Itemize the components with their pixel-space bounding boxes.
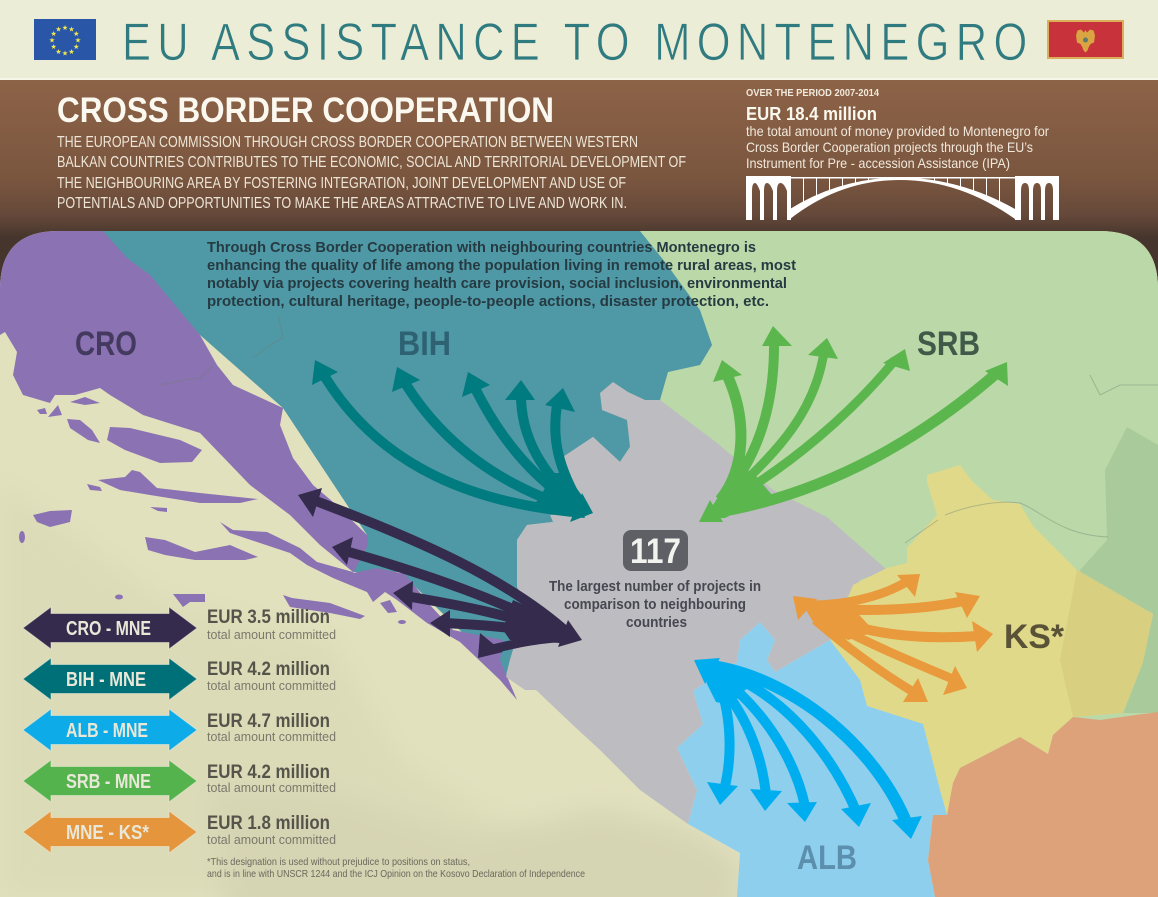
text block: intro paragraph: THE EUROPEAN COMMISSION THROUGH CROSS BORDER COOPERATION BETWEEN WESTERN (57, 134, 638, 151)
icon: EU flag: ★ (51, 43, 57, 51)
legend: BIH amount: EUR 4.2 million (207, 658, 330, 680)
icon: EU flag: ★ (73, 43, 79, 51)
icon: EU flag: ★ (62, 24, 68, 32)
icon: EU flag: ★ (55, 48, 62, 56)
callout: 117 projects (549, 530, 761, 631)
icon: EU flag: ★ (49, 36, 55, 44)
heading: cross border cooperation: CROSS BORDER COOPERATION (57, 91, 554, 130)
callout: 117 projects: comparison to neighbouring (564, 597, 746, 613)
legend: SRB amount (207, 764, 336, 792)
footnote: *This designation is used without prejudice to positions on status, (207, 856, 470, 868)
text block: quality of life statement (207, 239, 796, 310)
legend: SRB amount: total amount committed (207, 780, 336, 795)
text block: quality of life statement: enhancing the quality of life among the population living in remote rural areas, most (207, 257, 796, 274)
map region: Albania (677, 622, 947, 897)
legend: KS amount (207, 815, 336, 844)
map region: Croatia (0, 231, 517, 700)
icon: Montenegro flag (1048, 21, 1123, 58)
text block: intro paragraph: BALKAN COUNTRIES CONTRIBUTES TO THE ECONOMIC, SOCIAL AND TERRITORIAL DEVELOPMENT OF (57, 154, 686, 171)
text block: quality of life statement: protection, cultural heritage, people-to-people actions, disaster protection, etc. (207, 293, 769, 310)
legend: KS amount: EUR 1.8 million (207, 812, 330, 834)
arrows: SRB to Montenegro (699, 326, 1008, 522)
legend: BIH amount: total amount committed (207, 678, 336, 693)
icon: EU flag (34, 19, 96, 60)
arrows: Montenegro to KS (793, 574, 993, 702)
map: rivers (160, 315, 1158, 543)
legend: ALB - MNE (23, 709, 197, 751)
text block: quality of life statement: notably via projects covering health care provision, social inclusion, environmental (207, 275, 787, 292)
callout: 117 projects: countries (626, 615, 687, 631)
legend: CRO amount: total amount committed (207, 627, 336, 642)
map: land tone (0, 480, 620, 897)
legend: CRO amount (207, 609, 336, 639)
map region: Serbia (620, 231, 1158, 800)
text block: total funding (746, 87, 1049, 171)
text block: total funding: the total amount of money provided to Montenegro for (746, 123, 1049, 139)
legend: ALB amount: EUR 4.7 million (207, 710, 330, 732)
header band (0, 0, 1158, 80)
icon: EU flag: ★ (62, 50, 68, 58)
text block: quality of life statement: Through Cross Border Cooperation with neighbouring countries Montenegro is (207, 239, 756, 256)
panel: brown intro band (0, 80, 1158, 306)
arrows: BIH to Montenegro (312, 360, 593, 522)
legend: SRB amount: EUR 4.2 million (207, 761, 330, 783)
label: KS*: KS* (1004, 618, 1065, 656)
text block: total funding: Instrument for Pre - accession Assistance (IPA) (746, 155, 1010, 171)
legend: MNE - KS* (23, 811, 197, 853)
legend: MNE - KS*: MNE - KS* (66, 822, 149, 844)
icon: EU flag: ★ (51, 30, 57, 38)
legend: BIH - MNE (23, 658, 197, 700)
text block: intro paragraph: THE NEIGHBOURING AREA BY FOSTERING INTEGRATION, JOINT DEVELOPMENT AND USE OF (57, 175, 626, 192)
legend: ALB amount: total amount committed (207, 729, 336, 744)
legend: CRO amount: EUR 3.5 million (207, 606, 330, 628)
legend: BIH - MNE: BIH - MNE (66, 669, 146, 691)
callout: 117 projects: 117 (630, 532, 681, 571)
label: CRO: CRO (75, 325, 137, 363)
legend: KS amount: total amount committed (207, 832, 336, 847)
label: ALB: ALB (797, 839, 857, 877)
legend: BIH amount (207, 661, 336, 690)
map region: Serbia eastern shade (1080, 427, 1158, 713)
title: EU ASSISTANCE TO MONTENEGRO (122, 13, 1027, 72)
arrows: ALB to Montenegro (694, 658, 922, 839)
label: SRB: SRB (917, 325, 980, 363)
legend: ALB - MNE: ALB - MNE (66, 720, 148, 742)
map region: North Macedonia (928, 712, 1158, 897)
text block: total funding: Cross Border Cooperation projects through the EU’s (746, 139, 1033, 155)
icon: EU flag: ★ (68, 48, 75, 56)
footnote (207, 858, 585, 879)
icon: EU flag: ★ (55, 26, 62, 34)
map region: Kosovo (830, 465, 1153, 815)
text block: intro paragraph: POTENTIALS AND OPPORTUNITIES TO MAKE THE AREAS ATTRACTIVE TO LIVE AND WORK IN. (57, 195, 627, 212)
text block: total funding: EUR 18.4 million (746, 104, 877, 124)
text block: total funding: OVER THE PERIOD 2007-2014 (746, 87, 879, 99)
map region: Montenegro (506, 382, 887, 824)
arrows: CRO to Montenegro (298, 488, 582, 658)
icon: bridge (746, 176, 1059, 220)
footnote: and is in line with UNSCR 1244 and the ICJ Opinion on the Kosovo Declaration of Independence (207, 868, 585, 880)
icon: EU flag: ★ (68, 26, 75, 34)
text block: intro paragraph (57, 134, 686, 212)
legend: ALB amount (207, 713, 336, 741)
map region: Bosnia and Herzegovina (100, 231, 712, 680)
legend: SRB - MNE (23, 760, 197, 802)
icon: EU flag: ★ (75, 36, 81, 44)
label: BIH: BIH (398, 325, 451, 363)
map (0, 231, 1158, 897)
callout: 117 projects: The largest number of projects in (549, 579, 761, 595)
icon: EU flag: ★ (73, 30, 79, 38)
legend: SRB - MNE: SRB - MNE (66, 771, 151, 793)
map region: Kosovo eastern shade (1060, 570, 1153, 717)
legend: CRO - MNE: CRO - MNE (66, 618, 151, 640)
legend: CRO - MNE (23, 607, 197, 649)
